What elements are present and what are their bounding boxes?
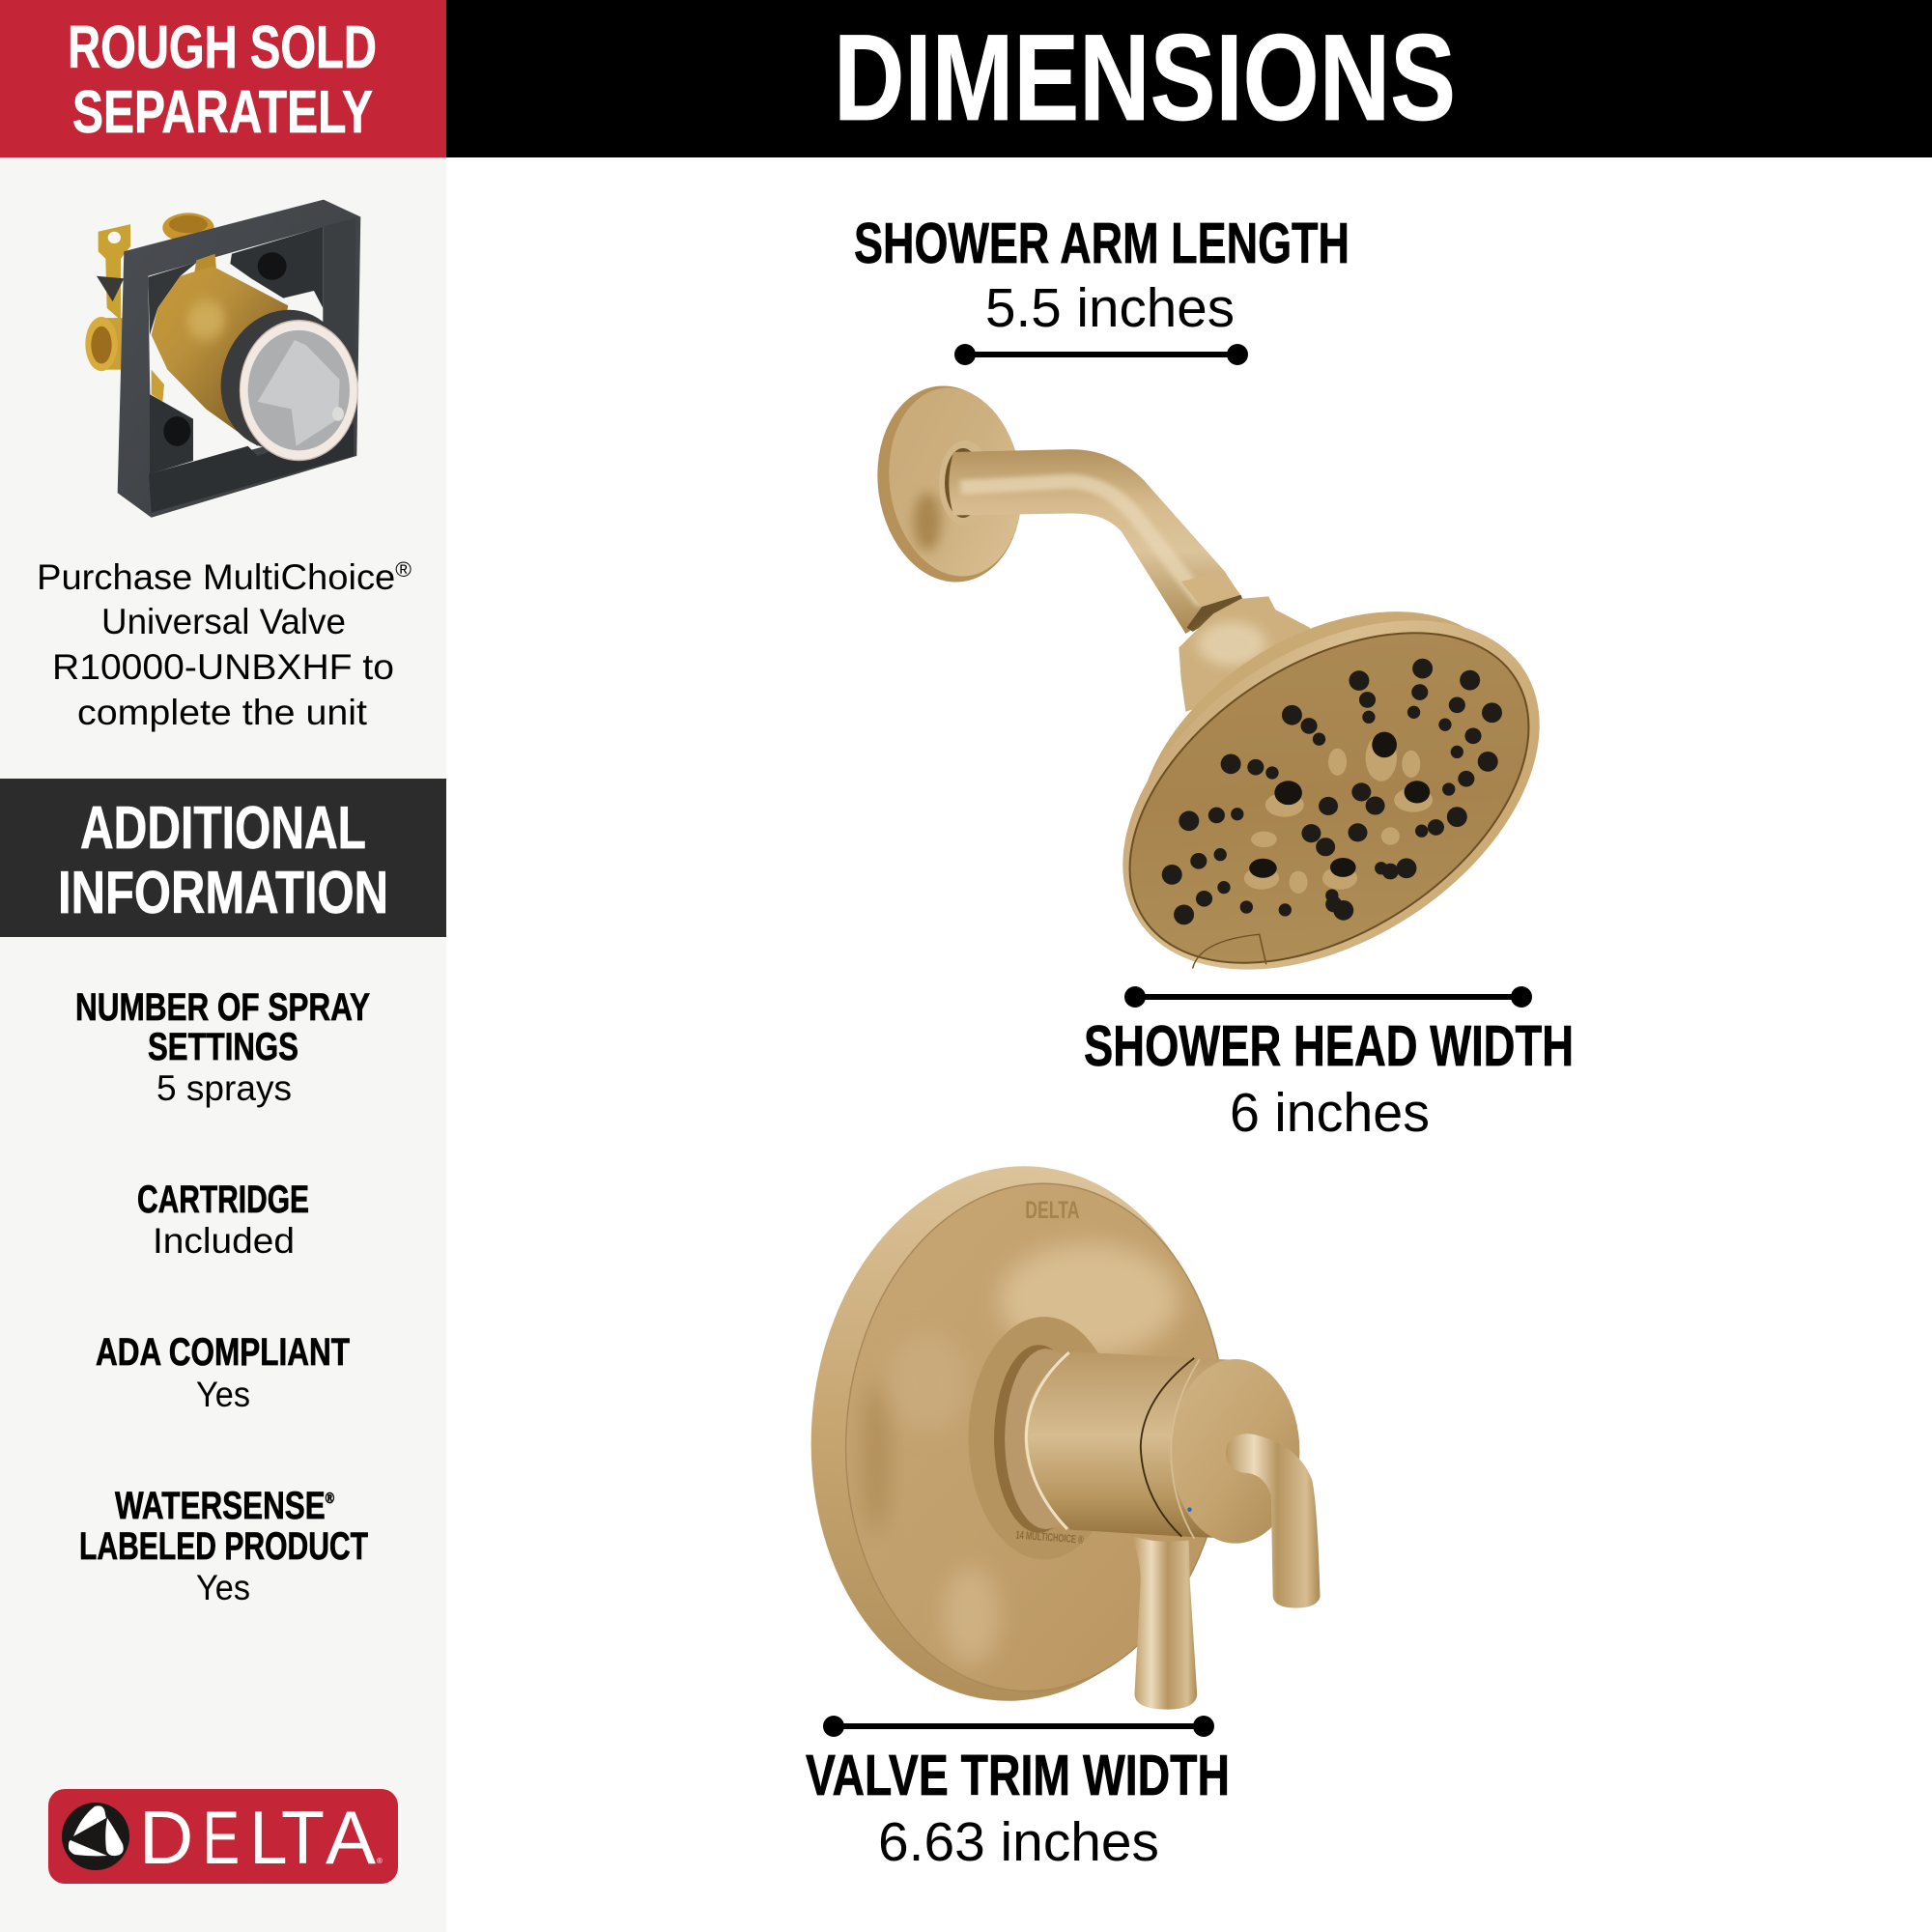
escutcheon rim — [793, 1152, 1239, 1715]
dimension: valve trim width: VALVE TRIM WIDTH — [806, 1744, 1230, 1807]
logo: delta — [48, 1789, 398, 1884]
dimension: valve trim width — [806, 1716, 1230, 1873]
frame inner walls — [230, 227, 323, 308]
spec: ada compliant: Yes — [196, 1375, 250, 1414]
text block: purchase note: Purchase MultiChoice — [37, 557, 384, 597]
dimension: shower arm length: SHOWER ARM LENGTH — [854, 212, 1350, 275]
arrow: measure bar — [823, 1716, 1214, 1737]
panel: sidebar background — [0, 0, 446, 1932]
text block: purchase note: complete the unit — [77, 693, 368, 732]
spec: cartridge: Included — [153, 1221, 295, 1261]
grey cap — [248, 330, 350, 450]
text block: purchase note: R10000-UNBXHF to — [52, 647, 394, 687]
wordmark: ® — [377, 1857, 383, 1865]
text block: purchase note: ® — [395, 557, 412, 582]
holes — [1249, 732, 1430, 878]
spec: ada compliant — [96, 1331, 350, 1414]
frame — [118, 200, 360, 518]
valve body — [152, 267, 288, 446]
banner: dimensions — [446, 0, 1932, 157]
heading: additional information — [0, 779, 446, 937]
spec: watersense: WATERSENSE — [115, 1485, 383, 1527]
spec: number of spray settings: NUMBER OF SPRAY — [75, 986, 370, 1029]
shower arm — [949, 449, 1320, 712]
thumb clip — [1193, 934, 1266, 968]
top brass pipe — [162, 213, 214, 242]
dimension: shower head width — [1084, 986, 1574, 1144]
wordmark: D — [139, 1795, 193, 1880]
knob cap — [1171, 1359, 1299, 1544]
arrow: measure bar — [1124, 986, 1532, 1008]
inner collar — [994, 1345, 1084, 1533]
cylinder — [1024, 1351, 1236, 1539]
blue dot — [1187, 1507, 1192, 1512]
banner: rough sold separately — [0, 0, 446, 157]
highlights — [1244, 735, 1433, 894]
spec: number of spray settings — [75, 986, 370, 1108]
spec: number of spray settings: 5 sprays — [156, 1068, 292, 1108]
lower lever — [1132, 1536, 1197, 1710]
right lever — [1226, 1434, 1320, 1608]
banner: rough sold separately: SEPARATELY — [72, 79, 373, 146]
dimension: shower head width: 6 inches — [1230, 1082, 1430, 1144]
cap band — [1141, 1358, 1194, 1537]
heading: additional information: INFORMATION — [58, 860, 388, 926]
plate logo: DELTA — [1025, 1197, 1079, 1224]
heading: additional information: ADDITIONAL — [80, 795, 366, 862]
head neck — [1179, 596, 1320, 712]
spec: watersense: Yes — [196, 1568, 250, 1607]
product photo: rough-in valve — [85, 200, 360, 518]
spec: watersense: LABELED PRODUCT — [79, 1525, 368, 1568]
banner: rough sold separately: ROUGH SOLD — [68, 14, 377, 81]
spec: number of spray settings: SETTINGS — [148, 1026, 298, 1068]
multichoice engraving: 14 MULTICHOICE ® — [1015, 1529, 1084, 1547]
dimension: valve trim width: 6.63 inches — [878, 1811, 1159, 1873]
title: DIMENSIONS — [834, 9, 1456, 146]
shower head dome — [1080, 546, 1571, 994]
icon: delta mark — [62, 1803, 129, 1870]
spec: ada compliant: ADA COMPLIANT — [96, 1331, 350, 1374]
arrow: measure bar — [954, 344, 1248, 365]
jets — [1162, 659, 1502, 924]
valve neck — [193, 254, 216, 281]
wordmark: T — [281, 1795, 325, 1880]
shower head rim — [1060, 549, 1603, 1041]
text block: purchase note: Universal Valve — [101, 602, 346, 641]
dark collar — [214, 298, 352, 461]
dimension: shower head width: SHOWER HEAD WIDTH — [1084, 1014, 1574, 1078]
wall flange — [866, 377, 1034, 591]
product photo: valve trim — [793, 1152, 1320, 1715]
dimension: shower arm length: 5.5 inches — [985, 277, 1235, 339]
spec: cartridge: CARTRIDGE — [137, 1179, 309, 1221]
left brass pipe — [99, 318, 126, 370]
spec: cartridge — [137, 1179, 309, 1261]
wordmark: A — [326, 1795, 376, 1880]
escutcheon plate — [829, 1171, 1242, 1704]
spec: watersense — [79, 1485, 368, 1607]
text block: purchase note — [37, 557, 412, 732]
chrome ring — [240, 321, 357, 461]
hub ring — [968, 1317, 1120, 1559]
plate shading — [864, 1382, 889, 1533]
product photo: shower head and arm — [866, 377, 1603, 1041]
wordmark — [139, 1795, 383, 1880]
nozzles and holes — [1162, 659, 1502, 968]
dimension: shower arm length — [854, 212, 1350, 365]
shower head face — [1070, 565, 1588, 1031]
wordmark: E — [203, 1795, 240, 1880]
wordmark: L — [249, 1795, 288, 1880]
spec: watersense: ® — [326, 1491, 334, 1507]
bracket — [99, 224, 130, 321]
